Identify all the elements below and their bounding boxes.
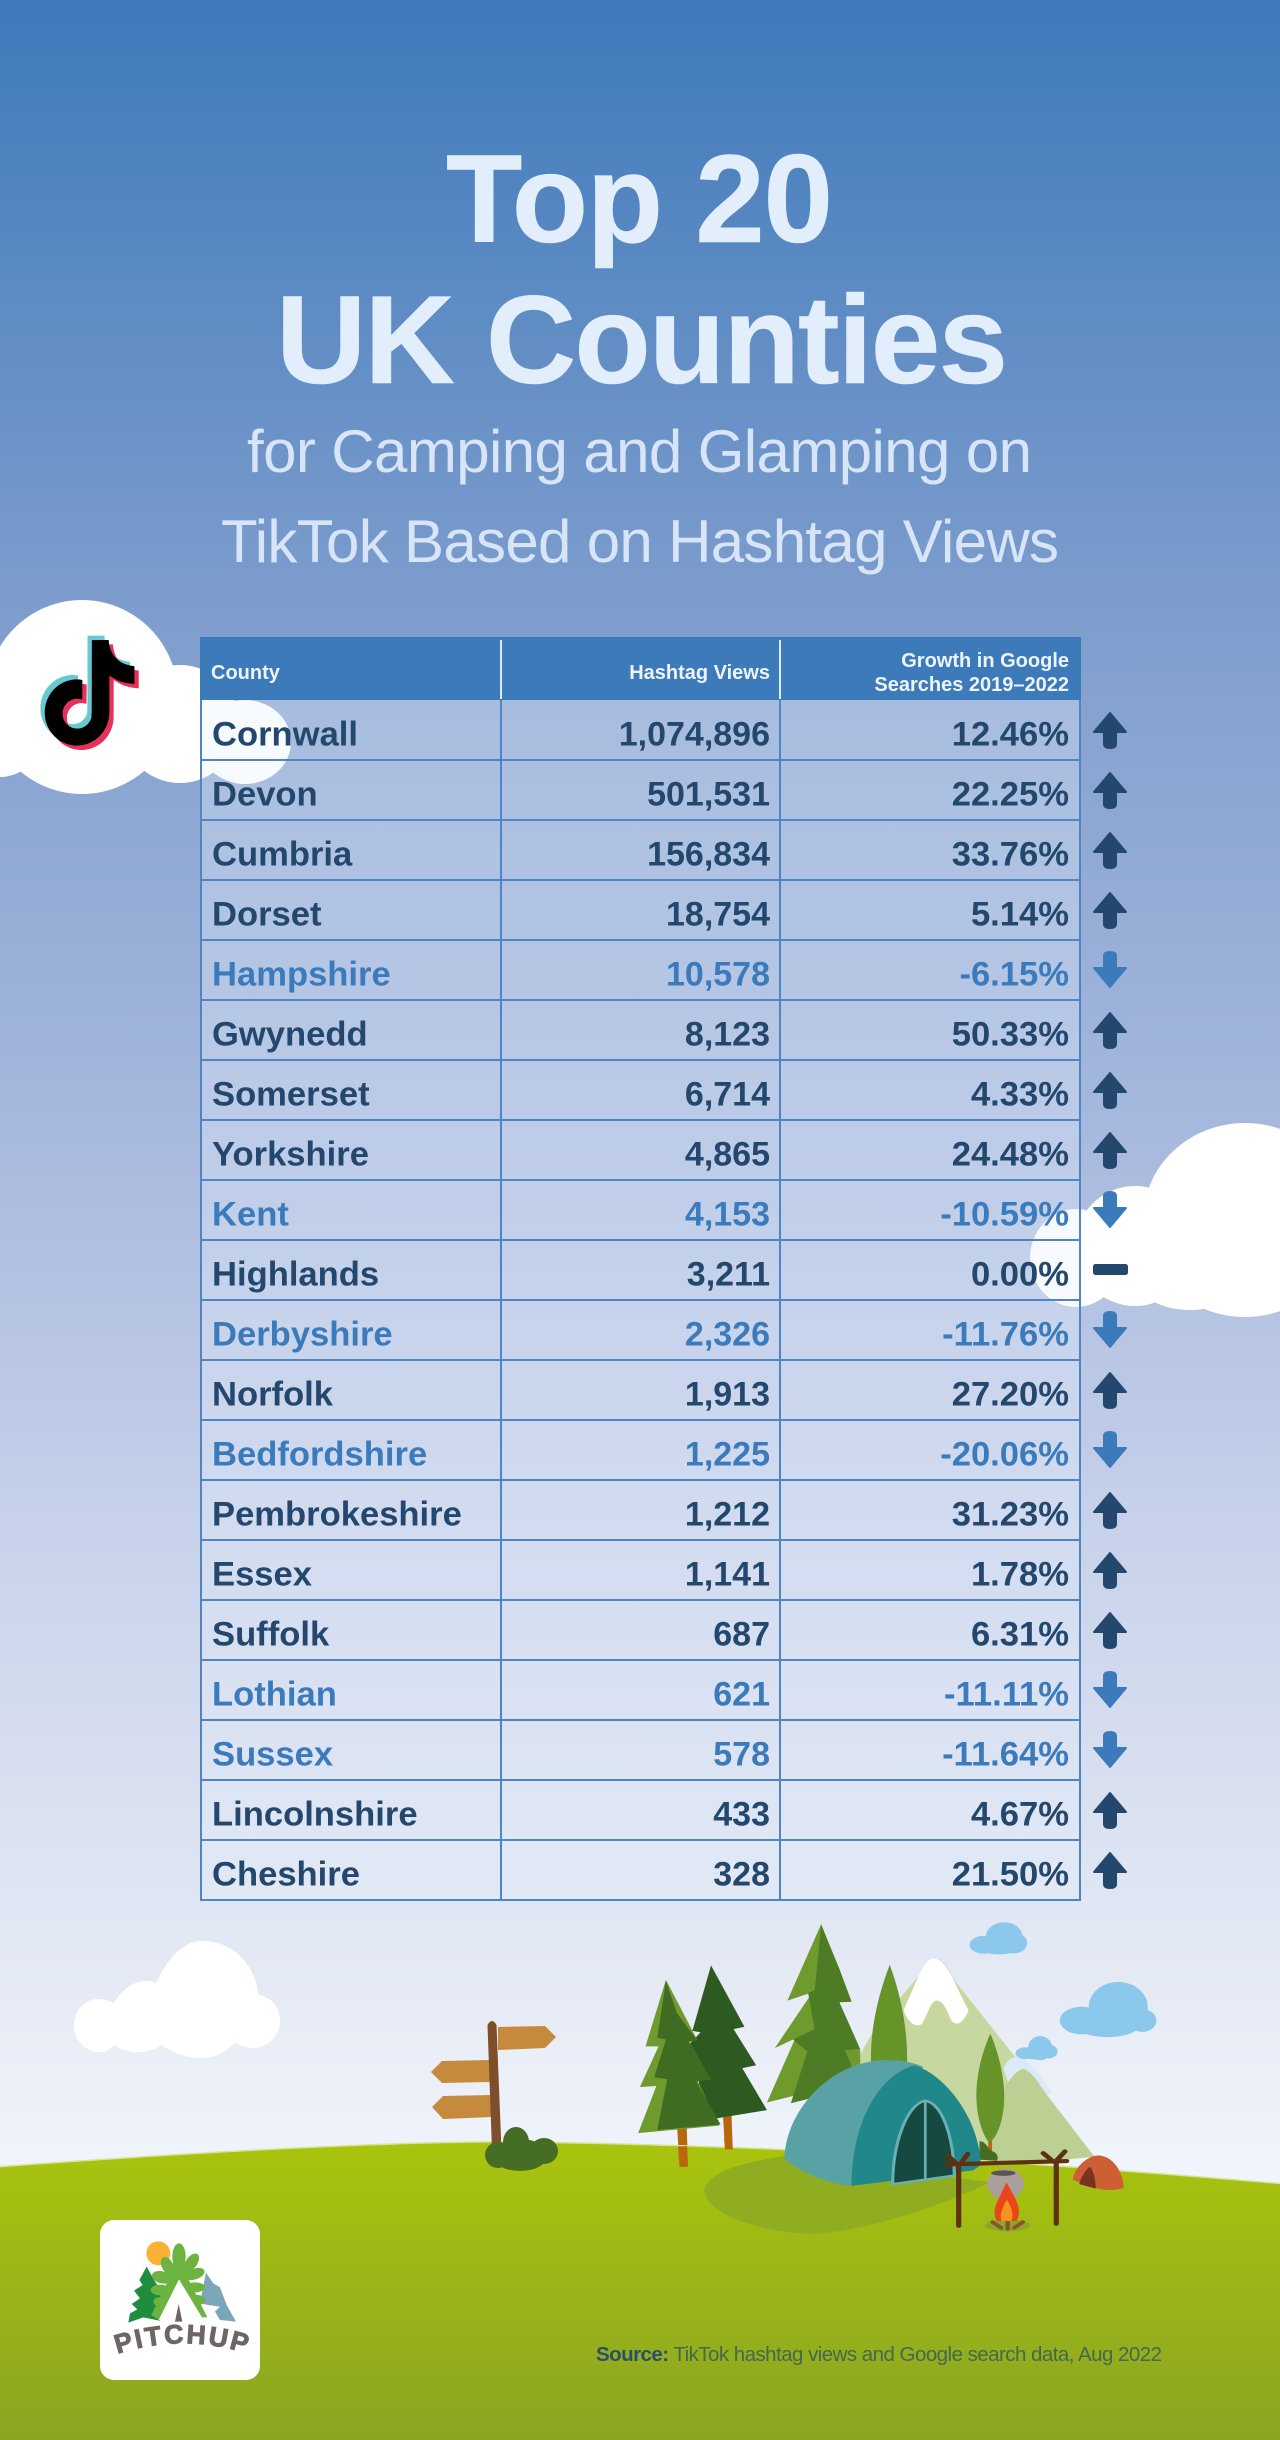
row: Lincolnshire: Lincolnshire: [212, 1796, 418, 1834]
title: [276, 130, 1008, 410]
table header: [200, 637, 1081, 700]
row: Cumbria: 156,834: [647, 836, 770, 874]
cloud with TikTok logo: [0, 600, 291, 794]
row: Norfolk: Norfolk: [212, 1376, 334, 1414]
row: Kent: [212, 1192, 1126, 1234]
trunks over the hill: [678, 2138, 733, 2167]
row: Yorkshire: Yorkshire: [212, 1136, 369, 1174]
row: Norfolk: 1,913: [685, 1376, 770, 1414]
tent shadow: [704, 2156, 990, 2234]
title: UK Counties: [276, 271, 1008, 410]
row: Cornwall: Cornwall: [212, 716, 358, 754]
icon: TikTok logo: [40, 636, 139, 750]
ground hill: [0, 2142, 1280, 2440]
row: Lincolnshire: 433: [713, 1796, 770, 1834]
blue cloud small lower: [1015, 2036, 1058, 2060]
row: Dorset: 5.14%: [971, 896, 1069, 934]
subtitle: [221, 418, 1059, 575]
Pitchup logo: [100, 2220, 260, 2380]
row: Sussex: -11.64%: [942, 1736, 1069, 1774]
row: Somerset: [212, 1073, 1126, 1114]
mountains: [856, 1959, 1094, 2172]
row: Gwynedd: [212, 1013, 1126, 1054]
row: Devon: [212, 773, 1126, 814]
row: Bedfordshire: [212, 1432, 1126, 1474]
row: Kent: 4,153: [685, 1196, 770, 1234]
row: Devon: Devon: [212, 776, 318, 814]
blue cloud large: [1060, 1982, 1156, 2037]
row: Highlands: 0.00%: [971, 1256, 1069, 1294]
row: Yorkshire: 24.48%: [952, 1136, 1069, 1174]
row: Lincolnshire: [212, 1793, 1126, 1834]
row: Cheshire: 328: [713, 1856, 770, 1894]
row: Lothian: Lothian: [212, 1676, 337, 1714]
row: Cumbria: 33.76%: [952, 836, 1069, 874]
small red tent: [1073, 2156, 1124, 2190]
campfire tripod: [946, 2151, 1067, 2226]
row: Lothian: [212, 1672, 1126, 1714]
row: Derbyshire: Derbyshire: [212, 1316, 393, 1354]
row: Sussex: Sussex: [212, 1736, 333, 1774]
row: Pembrokeshire: 31.23%: [952, 1496, 1069, 1534]
row: Lothian: 621: [713, 1676, 770, 1714]
table: [200, 637, 1128, 1900]
row: Pembrokeshire: 1,212: [685, 1496, 770, 1534]
white cloud bottom left: [74, 1941, 280, 2058]
row: Devon: 22.25%: [952, 776, 1069, 814]
row: Cheshire: 21.50%: [952, 1856, 1069, 1894]
row: Suffolk: 687: [713, 1616, 770, 1654]
row: Dorset: [212, 893, 1126, 934]
title: Top 20: [446, 130, 833, 269]
logo mountain: [200, 2273, 236, 2322]
row: Highlands: [212, 1256, 1128, 1294]
signpost with bush: [431, 2021, 558, 2171]
logo tent door: [175, 2304, 182, 2322]
row: Gwynedd: 50.33%: [952, 1016, 1069, 1054]
row: Yorkshire: [212, 1133, 1126, 1174]
table header: Hashtag Views: [629, 662, 770, 684]
row: Cumbria: [212, 833, 1126, 874]
row: Essex: 1,141: [685, 1556, 770, 1594]
row: Somerset: Somerset: [212, 1076, 370, 1114]
logo sun: [146, 2241, 170, 2265]
row: Somerset: 6,714: [685, 1076, 770, 1114]
row: Sussex: 578: [713, 1736, 770, 1774]
row: Essex: [212, 1553, 1126, 1594]
cloud right of table: [1030, 1123, 1280, 1317]
table header: Growth in Google: [901, 650, 1069, 672]
row: Lothian: -11.11%: [944, 1676, 1069, 1714]
row: Highlands: 3,211: [687, 1256, 770, 1294]
logo pine: [128, 2267, 168, 2323]
logo wordmark: [117, 2343, 249, 2354]
row: Cornwall: [212, 713, 1126, 754]
row: Pembrokeshire: [212, 1493, 1126, 1534]
row: Essex: Essex: [212, 1556, 312, 1594]
cypress behind tent: [871, 1965, 907, 2065]
row: Suffolk: Suffolk: [212, 1616, 330, 1654]
row: Derbyshire: -11.76%: [942, 1316, 1069, 1354]
row: Bedfordshire: Bedfordshire: [212, 1436, 427, 1474]
row: Derbyshire: 2,326: [685, 1316, 770, 1354]
row: Yorkshire: 4,865: [685, 1136, 770, 1174]
row: Lincolnshire: 4.67%: [971, 1796, 1069, 1834]
row: Cumbria: Cumbria: [212, 836, 353, 874]
row: Devon: 501,531: [647, 776, 770, 814]
row: Gwynedd: Gwynedd: [212, 1016, 368, 1054]
row: Hampshire: Hampshire: [212, 956, 391, 994]
row: Essex: 1.78%: [971, 1556, 1069, 1594]
Pitchup logo: PITCHUP: [113, 2324, 249, 2354]
cypress right of tent: [976, 2034, 1004, 2165]
campfire: [985, 2182, 1030, 2231]
row: Suffolk: [212, 1613, 1126, 1654]
source note: Source: TikTok hashtag views and Google search data, Aug 2022: [596, 2343, 1162, 2366]
row: Suffolk: 6.31%: [971, 1616, 1069, 1654]
row: Derbyshire: [212, 1312, 1126, 1354]
table body and grid: [200, 700, 1081, 1900]
pine tree front: [638, 1980, 721, 2167]
pine tree large: [767, 1924, 860, 2103]
row: Somerset: 4.33%: [971, 1076, 1069, 1114]
row: Dorset: 18,754: [666, 896, 770, 934]
logo leafy tree: [150, 2243, 207, 2321]
row: Cornwall: 1,074,896: [619, 716, 770, 754]
blue cloud small top: [970, 1922, 1027, 1954]
row: Highlands: Highlands: [212, 1256, 379, 1294]
row: Norfolk: [212, 1373, 1126, 1414]
row: Cheshire: Cheshire: [212, 1856, 360, 1894]
row: Dorset: Dorset: [212, 896, 322, 934]
table header: Searches 2019–2022: [874, 674, 1069, 696]
bush: [485, 2127, 558, 2171]
row: Bedfordshire: 1,225: [685, 1436, 770, 1474]
row: Hampshire: [212, 952, 1126, 994]
row: Cornwall: 12.46%: [952, 716, 1069, 754]
row: Kent: Kent: [212, 1196, 289, 1234]
subtitle: for Camping and Glamping on: [247, 418, 1032, 485]
row: Gwynedd: 8,123: [685, 1016, 770, 1054]
logo tent opening: [159, 2279, 202, 2320]
row: Norfolk: 27.20%: [952, 1376, 1069, 1414]
row: Hampshire: -6.15%: [959, 956, 1069, 994]
row: Sussex: [212, 1732, 1126, 1774]
scene behind the hill: trees, mountains: [638, 1924, 1094, 2172]
row: Kent: -10.59%: [940, 1196, 1069, 1234]
subtitle: TikTok Based on Hashtag Views: [221, 508, 1059, 575]
row: Cheshire: [212, 1853, 1126, 1894]
table header: County: [211, 662, 281, 684]
row: Pembrokeshire: Pembrokeshire: [212, 1496, 462, 1534]
row: Hampshire: 10,578: [666, 956, 770, 994]
cooking pot: [987, 2169, 1024, 2200]
pine tree back: [689, 1965, 767, 2149]
tree trunk and tent scene: [678, 1922, 1156, 2234]
row: Bedfordshire: -20.06%: [940, 1436, 1069, 1474]
tent: [784, 2060, 981, 2186]
